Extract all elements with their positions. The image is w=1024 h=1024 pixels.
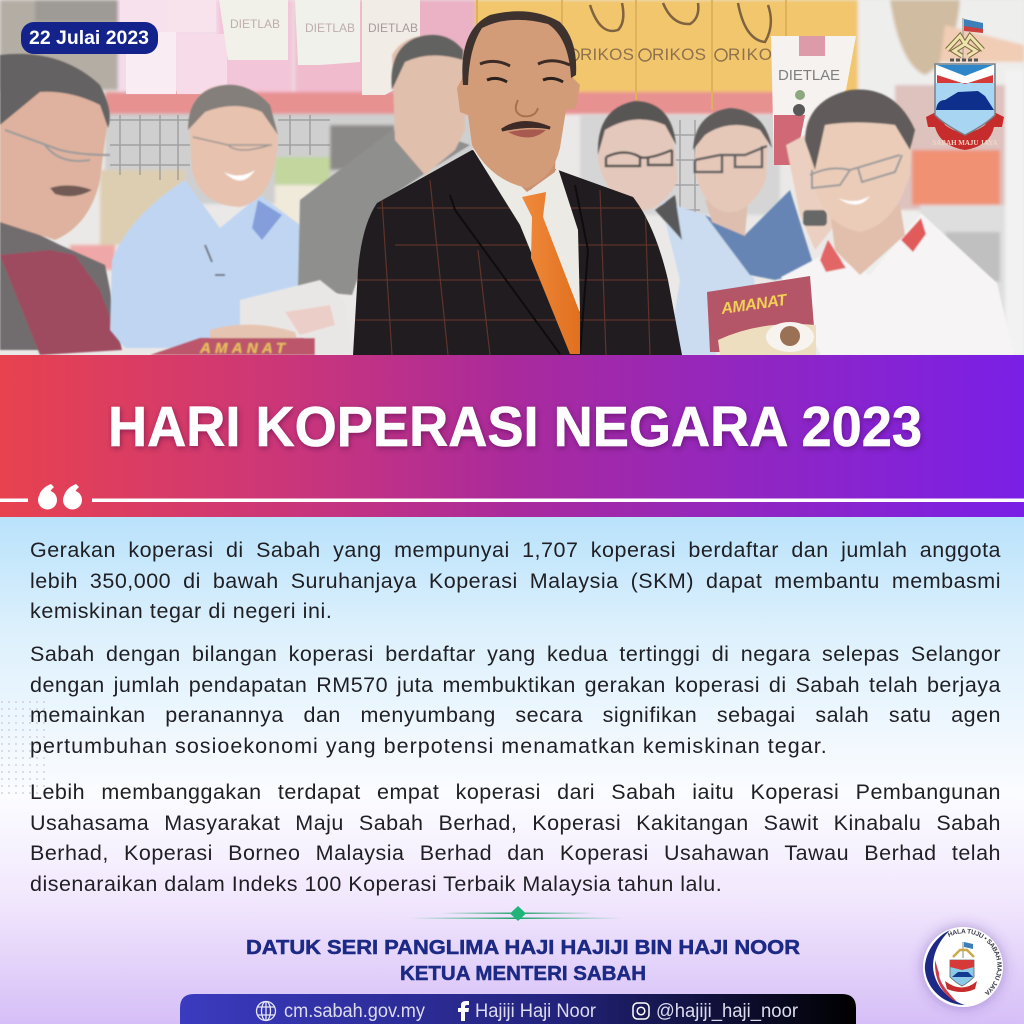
person 1 left: [0, 54, 122, 355]
person 3 grey shirt: [298, 35, 470, 295]
shirt: [472, 148, 580, 312]
paragraph 2: [30, 642, 1001, 758]
soft overlay wash: [0, 0, 1024, 355]
flag: [962, 18, 964, 60]
neck: [522, 162, 556, 192]
paragraph 3: Lebih membanggakan terdapat empat koperasi dari Sabah iaitu Koperasi Pembangunan: [30, 780, 1001, 804]
quote divider: [0, 484, 1024, 510]
round state emblem: [914, 918, 1012, 1014]
dotted decoration: [0, 700, 46, 796]
yellow BRIKOS bags: [477, 0, 786, 110]
tie: [522, 192, 580, 354]
main portrait: [353, 11, 682, 355]
nose shade: [516, 100, 538, 116]
jacket plaid: [353, 180, 680, 355]
shield: [935, 64, 995, 135]
paragraph 3: Berhad, Koperasi Borneo Malaysia Berhad dan Koperasi Usahawan Tawau Berhad telah: [30, 841, 1001, 865]
paragraph 2: dengan jumlah pendapatan RM570 juta membuktikan gerakan koperasi di Sabah telah berjaya: [30, 672, 1001, 696]
group photo: [0, 0, 1024, 357]
held plastic packet left: AMANAT: [199, 340, 287, 357]
icon: globe: [256, 1001, 276, 1021]
motto scroll: [926, 111, 1004, 150]
icon: instagram: [633, 1003, 649, 1019]
right DIETLAB packet: [771, 36, 856, 165]
motto text: SABAH MAJU JAYA: [932, 139, 998, 147]
hair: [462, 11, 576, 85]
person 5 blue shirt: [693, 108, 835, 280]
paragraph 3: disenaraikan dalam Indeks 100 Koperasi Terbaik Malaysia tahun lalu.: [30, 872, 722, 896]
website: cm.sabah.gov.my: [284, 1001, 425, 1022]
date badge: 22 Julai 2023: [29, 28, 149, 49]
title: HARI KOPERASI NEGARA 2023: [108, 395, 922, 459]
yellow BRIKOS bags: RIKOS: [580, 45, 634, 64]
pink DIETLAB packets: DIETLAB: [305, 21, 355, 35]
Sabah coat of arms: [926, 18, 1004, 150]
icon: facebook: [458, 1001, 469, 1021]
round state emblem: HALA TUJU • SABAH MAJU JAYA: [948, 928, 1002, 995]
pink DIETLAB packets: DIETLAB: [230, 17, 280, 31]
social media footer bar: [180, 994, 856, 1024]
grid: [110, 115, 700, 215]
right DIETLAB packet: DIETLAE: [778, 67, 840, 84]
signatory role: KETUA MENTERI SABAH: [400, 963, 646, 985]
paragraph 2: memainkan peranannya dan menyumbang secara signifikan sebagai salah satu agen: [30, 703, 1001, 727]
paragraph 1: lebih 350,000 di bawah Suruhanjaya Koperasi Malaysia (SKM) dapat membantu membasmi: [30, 568, 1001, 592]
AMANAT snack pack: AMANAT: [719, 292, 789, 318]
yellow BRIKOS bags: RIKOS: [652, 45, 706, 64]
signatory name: DATUK SERI PANGLIMA HAJI HAJIJI BIN HAJI NOOR: [246, 937, 801, 959]
moustache and mouth: [502, 122, 550, 130]
green ornament divider: [410, 906, 622, 921]
face: [457, 12, 580, 188]
instagram handle: @hajiji_haji_noor: [656, 1001, 799, 1022]
paragraph 1: Gerakan koperasi di Sabah yang mempunyai 1,707 koperasi berdaftar dan jumlah anggota: [30, 538, 1001, 562]
person 2 light blue shirt: [110, 85, 305, 348]
shop shelves background: [0, 0, 1024, 355]
person 4 glasses: [598, 101, 755, 355]
crossed arms crest: [947, 36, 983, 56]
AMANAT snack pack: [707, 276, 816, 355]
pink DIETLAB packets: DIETLAB: [368, 21, 418, 35]
paragraph 2: pertumbuhan sosioekonomi yang berpotensi menamatkan kemiskinan tegar.: [30, 734, 828, 758]
lapel edges: [450, 185, 588, 354]
paragraph 2: Sabah dengan bilangan koperasi berdaftar yang kedua tertinggi di negara selepas Selangor: [30, 642, 1001, 666]
paragraph 3: [30, 780, 1001, 896]
facebook name: Hajiji Haji Noor: [475, 1001, 597, 1022]
jacket: [353, 150, 682, 355]
brows and eyes: [480, 61, 570, 66]
held plastic packet left: [150, 280, 352, 357]
paragraph 1: kemiskinan tegar di negeri ini.: [30, 599, 332, 623]
date badge: [21, 22, 158, 54]
pink DIETLAB packets: [120, 0, 420, 95]
lower background gradient: [0, 517, 1024, 1024]
yellow BRIKOS bags: RIKO: [728, 45, 772, 64]
paragraph 1: [30, 538, 1001, 623]
person 6 white shirt: [781, 90, 1014, 355]
banner: [0, 355, 1024, 517]
paragraph 3: Usahasama Masyarakat Maju Sabah Berhad, Koperasi Kakitangan Sawit Kinabalu Sabah: [30, 810, 1001, 834]
